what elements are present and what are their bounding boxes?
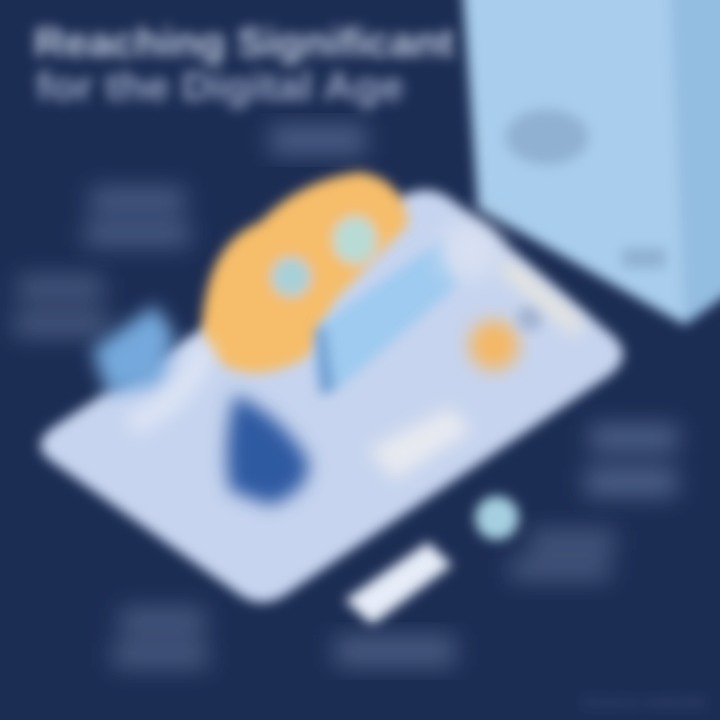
caption middle left — [14, 276, 109, 336]
blue cube left — [92, 305, 175, 395]
box small label — [622, 248, 666, 268]
caption upper left — [85, 188, 190, 246]
large server box, top right — [462, 0, 720, 325]
blue screen — [315, 238, 458, 395]
white keyboard — [368, 408, 472, 480]
ring left — [271, 257, 311, 297]
white glow beside screen — [440, 220, 500, 280]
box side face — [670, 0, 720, 325]
orange blob — [202, 172, 408, 373]
caption top centre — [270, 125, 366, 155]
title — [34, 21, 454, 109]
white swoosh — [130, 345, 205, 425]
title: for the Digital Age — [36, 65, 404, 109]
title: Reaching Significant — [34, 21, 454, 65]
cream bar — [505, 265, 580, 330]
caption bottom left — [113, 608, 208, 668]
small round teal dot — [475, 496, 519, 540]
footer caption: Source website — [582, 694, 707, 711]
box label — [505, 109, 589, 165]
caption right — [585, 425, 678, 496]
ring right — [333, 216, 377, 264]
orange coin — [469, 320, 519, 370]
caption lower right — [510, 530, 615, 580]
box front face — [462, 0, 685, 325]
platform — [40, 190, 623, 602]
white pill — [345, 542, 452, 625]
caption bottom centre — [335, 635, 455, 667]
dark blue shield — [227, 395, 308, 505]
small grey node — [517, 305, 543, 331]
